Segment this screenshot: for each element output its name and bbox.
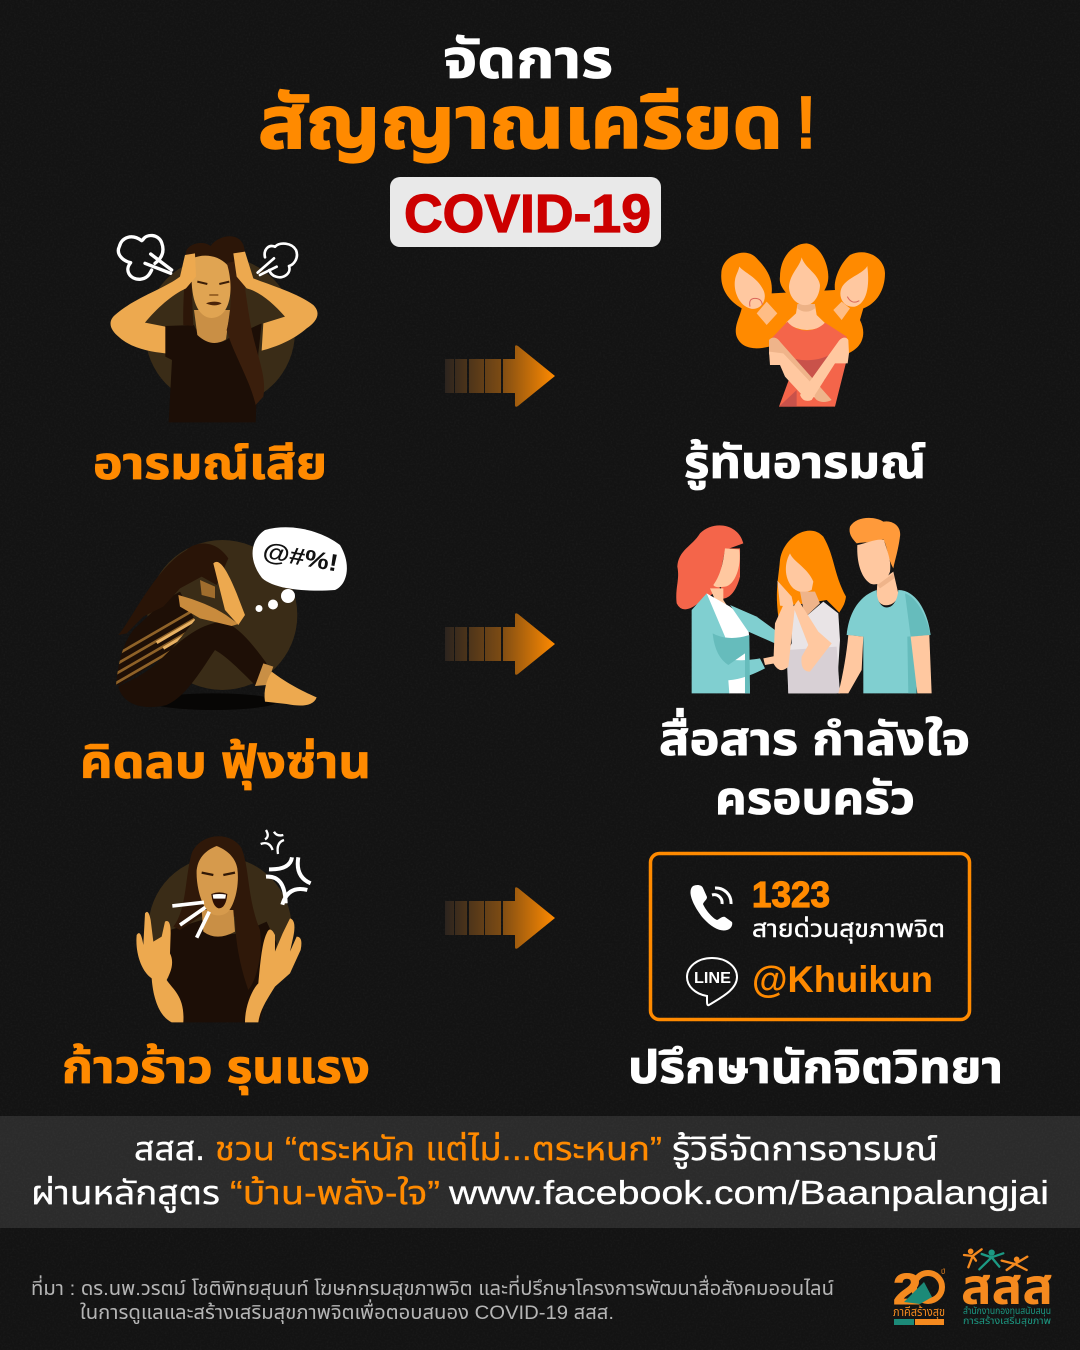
- icon: telephone: [690, 885, 732, 930]
- logo: 20 years: 2: [893, 1265, 921, 1314]
- arrow 3: [445, 887, 555, 949]
- label: อารมณ์เสีย: อารมณ์เสีย: [93, 438, 327, 489]
- title: สัญญาณเครียด: !: [796, 81, 816, 164]
- icon: LINE bubble: LINE: [694, 970, 731, 987]
- source note: ที่มา : ดร.นพ.วรตม์ โชติพิทยสุนนท์ โฆษกกรมสุขภาพจิต และที่ปรึกษาโครงการพัฒนาสื่อสังคมออนไลน์: [31, 1275, 834, 1300]
- illustration: three friends comforting: [676, 518, 932, 693]
- source note: [31, 1275, 834, 1325]
- arrow 1: [445, 345, 555, 407]
- banner: campaign message: ผ่านหลักสูตร: [31, 1174, 220, 1213]
- title: จัดการ: จัดการ: [443, 30, 613, 90]
- photo: stressed woman holding head: [111, 236, 318, 422]
- label: ปรึกษานักจิตวิทยา: ปรึกษานักจิตวิทยา: [628, 1042, 1003, 1093]
- label: คิดลบ ฟุ้งซ่าน: คิดลบ ฟุ้งซ่าน: [80, 736, 371, 790]
- panel: hotline and LINE contact: [650, 854, 970, 1020]
- text: @Khuikun: @Khuikun: [752, 959, 933, 1000]
- banner: campaign message: “บ้าน-พลัง-ใจ”: [230, 1174, 440, 1211]
- illustration: woman with three faces: [721, 243, 885, 407]
- label: สื่อสาร กำลังใจ: สื่อสาร กำลังใจ: [659, 708, 970, 765]
- source note: ในการดูแลและสร้างเสริมสุขภาพจิตเพื่อตอบสนอง COVID-19 สสส.: [80, 1299, 614, 1325]
- text: 1323: 1323: [752, 874, 830, 915]
- icon: steam puff left: [118, 236, 172, 279]
- logo: 20 years: ภาคีสร้างสุข: [893, 1305, 945, 1319]
- banner: campaign message: รู้วิธีจัดการอารมณ์: [672, 1130, 938, 1169]
- logo: 20 years: ปี: [940, 1268, 945, 1276]
- banner: campaign message: www.facebook.com/Baanpalangjai: [448, 1174, 1049, 1211]
- banner: campaign message: ชวน “ตระหนัก แต่ไม่...ตระหนก”: [215, 1130, 662, 1167]
- logo: สสส: สสส: [961, 1259, 1053, 1315]
- text: สายด่วนสุขภาพจิต: สายด่วนสุขภาพจิต: [752, 915, 945, 944]
- logo: 20 years: [893, 1265, 945, 1325]
- badge: COVID-19: COVID-19: [404, 184, 651, 244]
- arrow 2: [445, 613, 555, 675]
- icon: LINE bubble: [687, 958, 737, 1005]
- label: ครอบครัว: ครอบครัว: [715, 773, 915, 824]
- icon: thought bubble with symbols: [253, 527, 347, 612]
- icon: steam puff right: [258, 244, 297, 277]
- title: สัญญาณเครียด: สัญญาณเครียด: [258, 81, 783, 164]
- icon: thought bubble with symbols: @#%!: [261, 538, 340, 577]
- label: ก้าวร้าว รุนแรง: ก้าวร้าว รุนแรง: [62, 1041, 370, 1095]
- banner: campaign message: สสส.: [134, 1130, 205, 1167]
- logo: สสส: สำนักงานกองทุนสนับสนุน: [963, 1306, 1051, 1317]
- banner: campaign message: [0, 1116, 1080, 1228]
- photo: woman sitting curled up: [113, 540, 317, 710]
- icon: anger marks: [261, 830, 311, 905]
- logo: สสส: การสร้างเสริมสุขภาพ: [963, 1316, 1051, 1327]
- photo: angry shouting woman: [136, 836, 301, 1022]
- label: รู้ทันอารมณ์: รู้ทันอารมณ์: [684, 437, 926, 490]
